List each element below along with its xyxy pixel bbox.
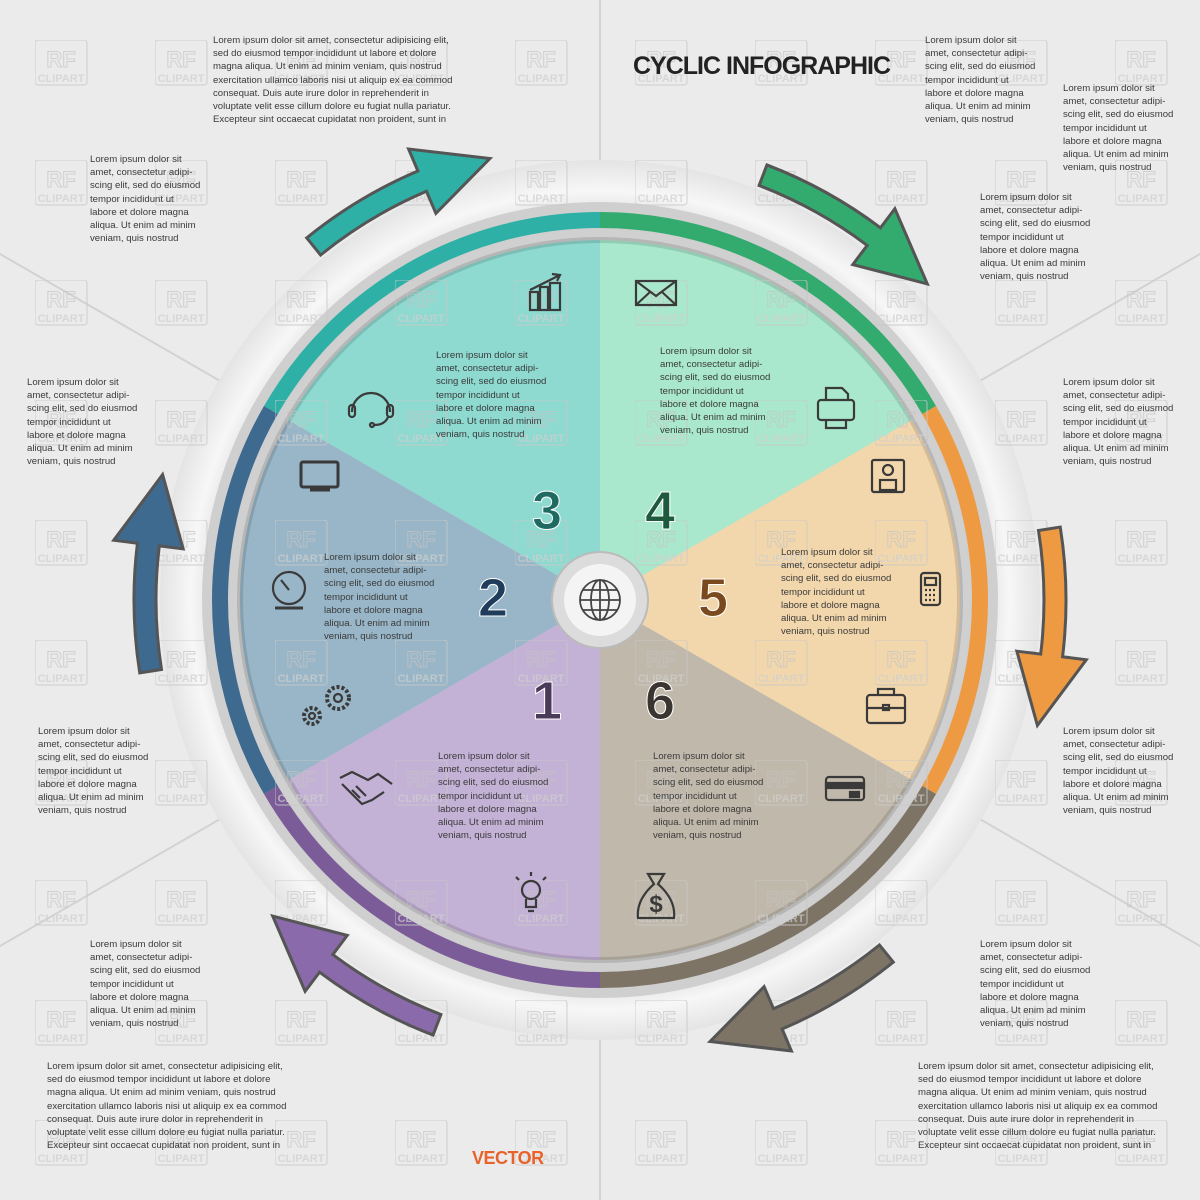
text: left middle: aliqua. Ut enim ad minim: [27, 443, 133, 454]
text: sector 4: veniam, quis nostrud: [660, 425, 749, 436]
text: sector 4: amet, consectetur adipi-: [660, 359, 762, 370]
text: sector 6: tempor incididunt ut: [653, 791, 737, 802]
title: CYCLIC INFOGRAPHIC: [633, 52, 890, 80]
arrow: brown: [710, 945, 893, 1051]
text: left bottom: amet, consectetur adipi-: [90, 952, 192, 963]
text: sector 5: amet, consectetur adipi-: [781, 560, 883, 571]
icon: chart: [530, 274, 560, 310]
text: right upper: scing elit, sed do eiusmod: [1063, 109, 1173, 120]
text: sector 6: labore et dolore magna: [653, 804, 752, 815]
text: top-right: veniam, quis nostrud: [925, 114, 1014, 125]
pie sectors: [240, 240, 960, 960]
icon: headset: [349, 393, 393, 427]
text: left upper: [90, 154, 200, 244]
icons: [273, 274, 940, 918]
icon: clock: [273, 572, 305, 608]
text: sector 3: [436, 350, 546, 440]
text: right bottom: [980, 939, 1090, 1029]
text: right lower: amet, consectetur adipi-: [1063, 739, 1165, 750]
text: right second: tempor incididunt ut: [980, 232, 1064, 243]
text: right lower: Lorem ipsum dolor sit: [1063, 726, 1155, 737]
arrow: blue: [63, 470, 246, 682]
text: sector 2: amet, consectetur adipi-: [324, 565, 426, 576]
text: right upper: Lorem ipsum dolor sit: [1063, 83, 1155, 94]
text: bottom-right long: voluptate velit esse cillum dolore eu fugiat nulla pariatur.: [918, 1127, 1156, 1138]
icon: phone: [921, 573, 940, 605]
text: top-left long: Excepteur sint occaecat cupidatat non proident, sunt in: [213, 114, 446, 125]
text: right lower: aliqua. Ut enim ad minim: [1063, 792, 1169, 803]
text: left upper: scing elit, sed do eiusmod: [90, 180, 200, 191]
icon: printer: [818, 388, 854, 428]
text: left bottom: labore et dolore magna: [90, 992, 189, 1003]
text: left middle: labore et dolore magna: [27, 430, 126, 441]
text: right middle: labore et dolore magna: [1063, 430, 1162, 441]
text: right bottom: labore et dolore magna: [980, 992, 1079, 1003]
text: sector 4: labore et dolore magna: [660, 399, 759, 410]
text: left lower: labore et dolore magna: [38, 779, 137, 790]
text: left upper: amet, consectetur adipi-: [90, 167, 192, 178]
icon: briefcase: [867, 689, 905, 723]
text: left middle: Lorem ipsum dolor sit: [27, 377, 119, 388]
text: top-left long: consequat. Duis aute irure dolor in reprehenderit in: [213, 88, 429, 99]
text: right lower: [1063, 726, 1173, 816]
text: sector 2: tempor incididunt ut: [324, 592, 408, 603]
text: sector 5: scing elit, sed do eiusmod: [781, 573, 891, 584]
icon: gears: [304, 687, 349, 724]
text: left bottom: [90, 939, 200, 1029]
text: left upper: Lorem ipsum dolor sit: [90, 154, 182, 165]
text: top-right: amet, consectetur adipi-: [925, 48, 1027, 59]
text: sector 6: veniam, quis nostrud: [653, 830, 742, 841]
text: bottom-left long: consequat. Duis aute irure dolor in reprehenderit in: [47, 1114, 263, 1125]
text: top-left long: voluptate velit esse cillum dolore eu fugiat nulla pariatur.: [213, 101, 451, 112]
text: sector 6: [653, 751, 763, 841]
text: sector 5: veniam, quis nostrud: [781, 626, 870, 637]
icon: monitor: [301, 462, 338, 490]
text: right second: aliqua. Ut enim ad minim: [980, 258, 1086, 269]
text: left upper: veniam, quis nostrud: [90, 233, 179, 244]
text: right lower: veniam, quis nostrud: [1063, 805, 1152, 816]
text: right bottom: scing elit, sed do eiusmod: [980, 965, 1090, 976]
text: left lower: tempor incididunt ut: [38, 766, 122, 777]
text: bottom-right long: sed do eiusmod tempor incididunt ut labore et dolore: [918, 1074, 1141, 1085]
text: 5: [698, 568, 728, 628]
text: right middle: tempor incididunt ut: [1063, 417, 1147, 428]
icon: disk: [872, 460, 904, 492]
arrow: orange: [954, 518, 1137, 730]
text: right second: scing elit, sed do eiusmod: [980, 218, 1090, 229]
text: sector 1: labore et dolore magna: [438, 804, 537, 815]
text: right middle: scing elit, sed do eiusmod: [1063, 403, 1173, 414]
text: sector 5: tempor incididunt ut: [781, 587, 865, 598]
footer: vector: VECTOR: [472, 1148, 544, 1168]
text: sector 2: Lorem ipsum dolor sit: [324, 552, 416, 563]
text: sector 2: veniam, quis nostrud: [324, 631, 413, 642]
arrow: purple: [264, 868, 448, 1080]
text: right upper: tempor incididunt ut: [1063, 123, 1147, 134]
text: right middle: Lorem ipsum dolor sit: [1063, 377, 1155, 388]
text: bottom-left long: sed do eiusmod tempor incididunt ut labore et dolore: [47, 1074, 270, 1085]
text: sector 1: tempor incididunt ut: [438, 791, 522, 802]
text: left lower: aliqua. Ut enim ad minim: [38, 792, 144, 803]
text: left middle: tempor incididunt ut: [27, 417, 111, 428]
text: 1: [532, 671, 562, 731]
text: sector 2: [324, 552, 434, 642]
text: right second: [980, 192, 1090, 282]
text: sector 1: Lorem ipsum dolor sit: [438, 751, 530, 762]
text: right bottom: amet, consectetur adipi-: [980, 952, 1082, 963]
icon: handshake: [340, 772, 392, 804]
text: top-left long: [213, 35, 452, 125]
text: left upper: tempor incididunt ut: [90, 194, 174, 205]
icon: card: [826, 777, 864, 800]
text: left bottom: scing elit, sed do eiusmod: [90, 965, 200, 976]
text: sector 1: scing elit, sed do eiusmod: [438, 777, 548, 788]
text: top-right: tempor incididunt ut: [925, 75, 1009, 86]
text: right lower: tempor incididunt ut: [1063, 766, 1147, 777]
text: sector 3: veniam, quis nostrud: [436, 429, 525, 440]
text: top-left long: magna aliqua. Ut enim ad minim veniam, quis nostrud: [213, 61, 442, 72]
text: sector 6: scing elit, sed do eiusmod: [653, 777, 763, 788]
text: left bottom: Lorem ipsum dolor sit: [90, 939, 182, 950]
text: sector 3: labore et dolore magna: [436, 403, 535, 414]
text: left middle: scing elit, sed do eiusmod: [27, 403, 137, 414]
text: sector 5: aliqua. Ut enim ad minim: [781, 613, 887, 624]
text: sector 5: Lorem ipsum dolor sit: [781, 547, 873, 558]
text: sector 3: aliqua. Ut enim ad minim: [436, 416, 542, 427]
text: right bottom: veniam, quis nostrud: [980, 1018, 1069, 1029]
text: left lower: amet, consectetur adipi-: [38, 739, 140, 750]
text: right second: amet, consectetur adipi-: [980, 205, 1082, 216]
text: top-left long: sed do eiusmod tempor incididunt ut labore et dolore: [213, 48, 436, 59]
text: right bottom: tempor incididunt ut: [980, 979, 1064, 990]
text: left lower: veniam, quis nostrud: [38, 805, 127, 816]
text: right second: labore et dolore magna: [980, 245, 1079, 256]
text: bottom-left long: voluptate velit esse cillum dolore eu fugiat nulla pariatur.: [47, 1127, 285, 1138]
text: right upper: amet, consectetur adipi-: [1063, 96, 1165, 107]
text: bottom-left long: magna aliqua. Ut enim ad minim veniam, quis nostrud: [47, 1087, 276, 1098]
text: sector 2: aliqua. Ut enim ad minim: [324, 618, 430, 629]
text: left upper: labore et dolore magna: [90, 207, 189, 218]
text: right bottom: aliqua. Ut enim ad minim: [980, 1005, 1086, 1016]
text: sector 3: amet, consectetur adipi-: [436, 363, 538, 374]
text: right middle: amet, consectetur adipi-: [1063, 390, 1165, 401]
text: bottom-left long: [47, 1061, 286, 1151]
text: right bottom: Lorem ipsum dolor sit: [980, 939, 1072, 950]
text: left bottom: aliqua. Ut enim ad minim: [90, 1005, 196, 1016]
text: left lower: scing elit, sed do eiusmod: [38, 752, 148, 763]
text: sector 3: tempor incididunt ut: [436, 390, 520, 401]
text: right lower: scing elit, sed do eiusmod: [1063, 752, 1173, 763]
text: top-left long: exercitation ullamco laboris nisi ut aliquip ex ea commod: [213, 75, 452, 86]
text: right second: Lorem ipsum dolor sit: [980, 192, 1072, 203]
text: sector 1: veniam, quis nostrud: [438, 830, 527, 841]
text: right upper: labore et dolore magna: [1063, 136, 1162, 147]
text: sector 6: Lorem ipsum dolor sit: [653, 751, 745, 762]
text: right middle: veniam, quis nostrud: [1063, 456, 1152, 467]
text: sector 6: aliqua. Ut enim ad minim: [653, 817, 759, 828]
text: left bottom: tempor incididunt ut: [90, 979, 174, 990]
text: sector 4: Lorem ipsum dolor sit: [660, 346, 752, 357]
text: bottom-right long: exercitation ullamco laboris nisi ut aliquip ex ea commod: [918, 1101, 1157, 1112]
text: top-right: [925, 35, 1035, 125]
text: 2: [478, 568, 508, 628]
text: bottom-left long: exercitation ullamco laboris nisi ut aliquip ex ea commod: [47, 1101, 286, 1112]
text: top-left long: Lorem ipsum dolor sit amet, consectetur adipisicing elit,: [213, 35, 449, 46]
text: 6: [645, 671, 675, 731]
text: left middle: amet, consectetur adipi-: [27, 390, 129, 401]
icon: money bag: [638, 874, 674, 918]
text: sector 3: scing elit, sed do eiusmod: [436, 376, 546, 387]
text: right lower: labore et dolore magna: [1063, 779, 1162, 790]
text: right middle: [1063, 377, 1173, 467]
arrow: green: [752, 120, 936, 332]
text: right second: veniam, quis nostrud: [980, 271, 1069, 282]
center globe: [552, 552, 648, 648]
text: left middle: veniam, quis nostrud: [27, 456, 116, 467]
text: sector 1: aliqua. Ut enim ad minim: [438, 817, 544, 828]
text: bottom-right long: Excepteur sint occaecat cupidatat non proident, sunt in: [918, 1140, 1151, 1151]
text: top-right: Lorem ipsum dolor sit: [925, 35, 1017, 46]
text: sector 1: amet, consectetur adipi-: [438, 764, 540, 775]
text: 4: [645, 481, 675, 541]
text: bottom-left long: Excepteur sint occaecat cupidatat non proident, sunt in: [47, 1140, 280, 1151]
text: bottom-right long: magna aliqua. Ut enim ad minim veniam, quis nostrud: [918, 1087, 1147, 1098]
text: sector 2: labore et dolore magna: [324, 605, 423, 616]
arrow: teal: [307, 149, 490, 255]
text: sector 6: amet, consectetur adipi-: [653, 764, 755, 775]
text: right upper: aliqua. Ut enim ad minim: [1063, 149, 1169, 160]
text: right upper: veniam, quis nostrud: [1063, 162, 1152, 173]
text: sector 5: [781, 547, 891, 637]
text: top-right: labore et dolore magna: [925, 88, 1024, 99]
ring segments: [220, 220, 980, 980]
icon: bulb: [516, 872, 546, 911]
text: sector 4: tempor incididunt ut: [660, 386, 744, 397]
numbers: 3: [532, 481, 562, 541]
text: sector 3: Lorem ipsum dolor sit: [436, 350, 528, 361]
text: top-right: aliqua. Ut enim ad minim: [925, 101, 1031, 112]
text: right upper: [1063, 83, 1173, 173]
text: sector 4: [660, 346, 770, 436]
text: sector 4: scing elit, sed do eiusmod: [660, 372, 770, 383]
text: left lower: [38, 726, 148, 816]
text: bottom-right long: [918, 1061, 1157, 1151]
text: left bottom: veniam, quis nostrud: [90, 1018, 179, 1029]
text: left lower: Lorem ipsum dolor sit: [38, 726, 130, 737]
text: top-right: scing elit, sed do eiusmod: [925, 61, 1035, 72]
text: sector 5: labore et dolore magna: [781, 600, 880, 611]
text: sector 2: scing elit, sed do eiusmod: [324, 578, 434, 589]
text: right middle: aliqua. Ut enim ad minim: [1063, 443, 1169, 454]
text: left middle: [27, 377, 137, 467]
text: sector 4: aliqua. Ut enim ad minim: [660, 412, 766, 423]
text: sector 1: [438, 751, 548, 841]
text: left upper: aliqua. Ut enim ad minim: [90, 220, 196, 231]
text: bottom-left long: Lorem ipsum dolor sit amet, consectetur adipisicing elit,: [47, 1061, 283, 1072]
text: bottom-right long: consequat. Duis aute irure dolor in reprehenderit in: [918, 1114, 1134, 1125]
icon: money bag: $: [649, 891, 663, 918]
text: bottom-right long: Lorem ipsum dolor sit amet, consectetur adipisicing elit,: [918, 1061, 1154, 1072]
icon: envelope: [636, 281, 676, 305]
